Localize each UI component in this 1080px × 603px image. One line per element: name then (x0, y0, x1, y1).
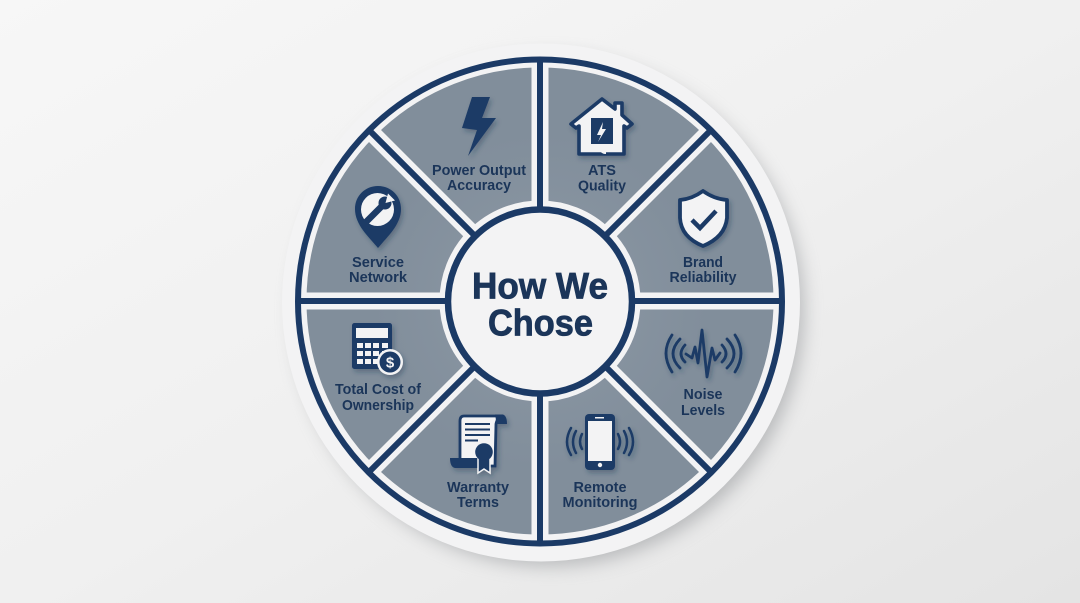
label: Service Network (349, 254, 408, 286)
icon: calculator with dollar coin: $ (386, 354, 395, 372)
centre hub (448, 210, 632, 394)
label: Brand Reliability: Reliability (670, 269, 737, 286)
title (472, 266, 608, 344)
icon: shield with check (680, 191, 727, 246)
segment: Warranty Terms (447, 414, 510, 511)
label: Noise Levels (681, 386, 725, 419)
label: Total Cost of Ownership: Ownership (342, 397, 414, 414)
disc shadow (294, 56, 804, 566)
white disc (282, 44, 800, 562)
icon: location pin with wrench (355, 186, 401, 248)
label: Power Output Accuracy (432, 162, 526, 194)
label: ATS Quality: ATS (588, 162, 616, 179)
label: Power Output Accuracy: Power Output (432, 162, 526, 179)
segment: Total Cost of Ownership (335, 323, 422, 414)
label: Total Cost of Ownership: Total Cost of (335, 381, 422, 398)
label: Total Cost of Ownership (335, 381, 422, 414)
label: Noise Levels: Noise (684, 386, 722, 403)
label: Brand Reliability (670, 254, 737, 286)
icon: house with switch (571, 99, 632, 154)
outer ring (298, 60, 782, 544)
label: Remote Monitoring: Monitoring (562, 494, 638, 511)
segment: Power Output Accuracy (432, 97, 526, 194)
segment: Noise Levels (666, 330, 741, 419)
label: ATS Quality (578, 162, 627, 194)
label: Power Output Accuracy: Accuracy (447, 177, 512, 194)
label: Service Network: Service (352, 254, 404, 271)
segment: Brand Reliability (670, 191, 737, 286)
label: Service Network: Network (349, 269, 408, 286)
label: Warranty Terms (447, 479, 510, 511)
title: How We (472, 266, 608, 306)
icon: lightning bolt (462, 97, 496, 156)
icon: sound waveform (666, 330, 741, 377)
icon: smartphone with signal (567, 414, 633, 470)
label: Noise Levels: Levels (681, 402, 725, 419)
icon: warranty scroll with seal (450, 414, 507, 473)
segment: Service Network (349, 186, 408, 286)
label: Remote Monitoring: Remote (574, 479, 626, 496)
label: Warranty Terms: Warranty (447, 479, 510, 496)
segment: Remote Monitoring (562, 414, 638, 511)
label: ATS Quality: Quality (578, 178, 627, 194)
title: Chose (488, 302, 593, 344)
segment: ATS Quality (571, 99, 632, 194)
label: Warranty Terms: Terms (457, 494, 499, 511)
label: Brand Reliability: Brand (683, 254, 723, 271)
label: Remote Monitoring (562, 479, 638, 511)
wheel segments (298, 60, 782, 542)
